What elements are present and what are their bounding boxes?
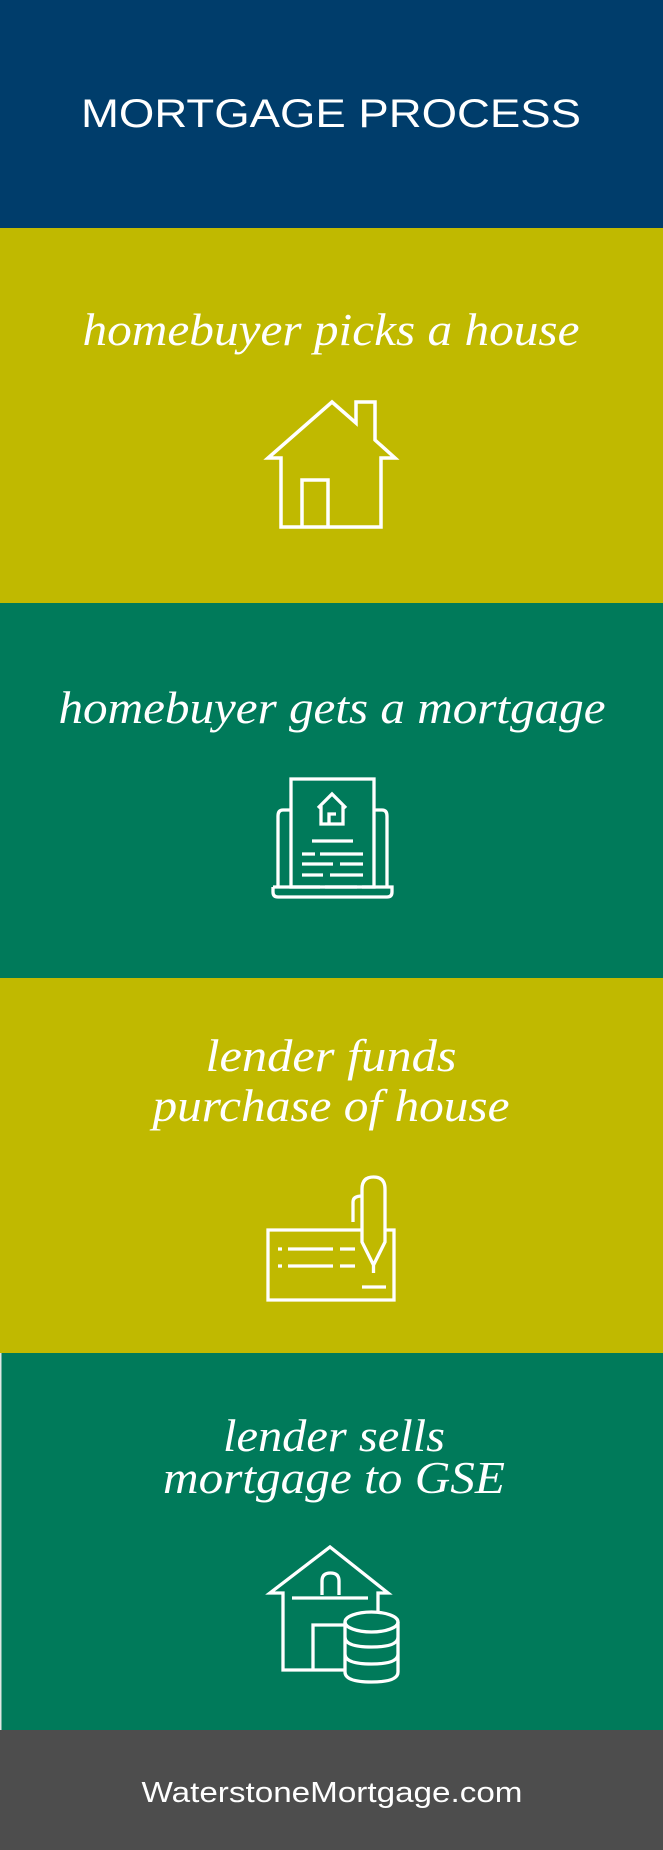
heading: lender funds [206, 1030, 456, 1081]
heading: homebuyer gets a mortgage [58, 682, 606, 733]
heading: mortgage to GSE [163, 1452, 505, 1503]
heading: purchase of house [149, 1080, 509, 1131]
panel: sells to GSE [0, 1353, 663, 1730]
footer url: WaterstoneMortgage.com [142, 1777, 522, 1809]
icon: check and pen [268, 1177, 394, 1300]
icon: house with database [270, 1547, 398, 1682]
panel: gets a mortgage [0, 603, 663, 978]
panel: lender funds [0, 978, 663, 1353]
title: MORTGAGE PROCESS [81, 92, 581, 136]
heading [163, 1410, 505, 1503]
heading [149, 1030, 509, 1131]
footer [0, 1730, 663, 1850]
panel: picks a house [0, 228, 663, 603]
header panel [0, 0, 663, 228]
heading: lender sells [223, 1410, 445, 1461]
icon: mortgage document [273, 779, 392, 897]
heading: homebuyer picks a house [82, 304, 580, 355]
icon: house [268, 402, 395, 527]
